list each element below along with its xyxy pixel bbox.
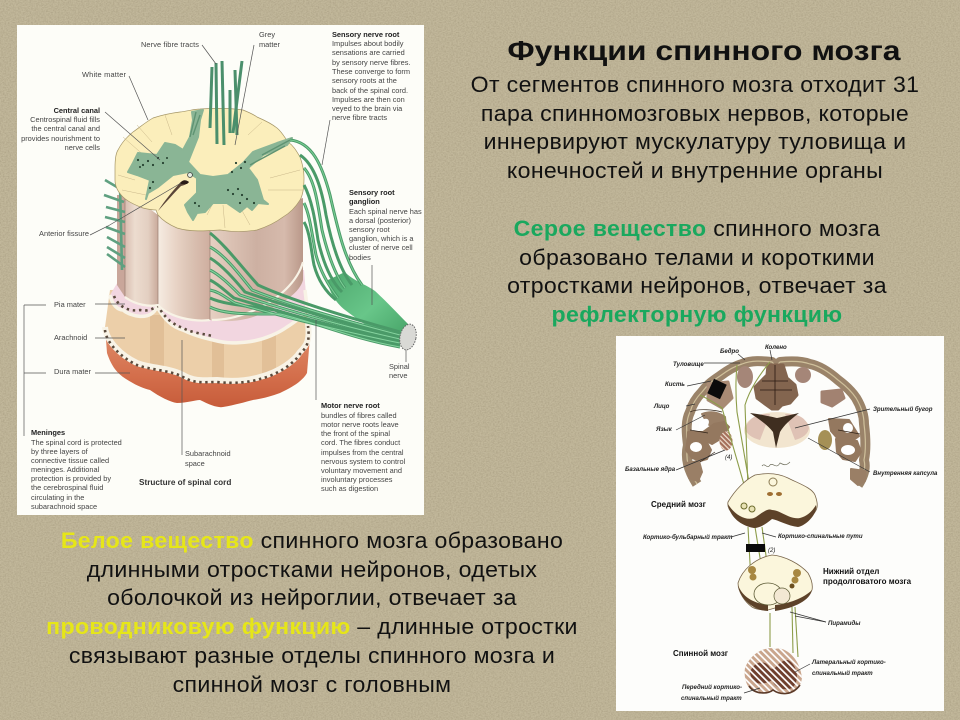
brain and pathway labels: Пирамиды — [828, 620, 861, 627]
meninges: pia mater — [110, 270, 307, 343]
diagram labels: Pia mater — [54, 300, 86, 309]
text block: white matter: связывают разные отделы спинного мозга и — [69, 643, 555, 668]
diagram labels: protection is provided by — [31, 474, 111, 483]
diagram labels: sensations are carried — [332, 48, 405, 57]
text block: spinal nerves: От сегментов спинного мозга отходит 31 — [471, 72, 919, 97]
brain and pathway labels: Туловище — [673, 361, 704, 368]
diagram labels: bodies — [349, 253, 371, 262]
text block: grey matter: образовано телами и короткими — [519, 245, 875, 270]
meninges: arachnoid — [105, 285, 309, 383]
text block: grey matter: отростками нейронов, отвечает за — [507, 273, 887, 298]
diagram labels: Impulses about bodily — [332, 39, 404, 48]
upper gyri — [737, 366, 753, 388]
diagram labels: Arachnoid — [54, 333, 87, 342]
thalamus and ventricle — [744, 412, 810, 448]
text block: grey matter — [507, 216, 887, 327]
brain and pathway labels: (4) — [725, 454, 732, 461]
diagram labels: Grey — [259, 30, 275, 39]
brain and pathway labels: спинальный тракт — [681, 695, 742, 702]
diagram labels: Sensory root — [349, 188, 395, 197]
text block: spinal nerves: конечностей и внутренние органы — [507, 158, 883, 183]
brain and pathway labels: Лицо — [653, 403, 670, 410]
central gyri — [755, 365, 797, 409]
corticospinal tract lines — [700, 362, 798, 657]
brain and pathway labels: Кисть — [665, 381, 685, 388]
text block: white matter: оболочкой из нейроглии, отвечает за — [107, 585, 517, 610]
panel: corticospinal pathways diagram: Нижний отдел — [823, 567, 879, 576]
diagram labels: bundles of fibres called — [321, 411, 397, 420]
diagram labels: sensory root — [349, 225, 390, 234]
panel: corticospinal pathways diagram: Спинной мозг — [673, 649, 729, 658]
brain and pathway labels: спинальный тракт — [812, 670, 873, 677]
diagram labels: veyed to the brain via — [332, 104, 403, 113]
medulla section — [738, 555, 812, 611]
diagram labels: cluster of nerve cell — [349, 243, 413, 252]
diagram labels: Meninges — [31, 428, 65, 437]
text block: white matter: Белое вещество спинного мозга образовано — [61, 528, 563, 553]
diagram labels: Dura mater — [54, 367, 92, 376]
cut surface: grey matter — [128, 110, 292, 220]
diagram labels: cord. The fibres conduct — [321, 438, 400, 447]
diagram labels: Nerve fibre tracts — [141, 40, 199, 49]
text block: white matter: спинной мозг с головным — [173, 672, 451, 697]
diagram labels: These converge to form — [332, 67, 410, 76]
diagram labels: White matter — [82, 70, 127, 79]
diagram labels: a dorsal (posterior) — [349, 216, 411, 225]
text block: spinal nerves — [471, 72, 919, 183]
spinal columns — [117, 190, 303, 321]
spinal cord section — [745, 648, 802, 694]
diagram labels: by three layers of — [31, 447, 89, 456]
diagram labels: nervous system to control — [321, 457, 406, 466]
brain cortex arch — [686, 361, 866, 485]
diagram labels: provides nourishment to — [21, 134, 100, 143]
meninges: dura mater — [105, 327, 310, 407]
diagram labels: Centrospinal fluid fills — [30, 115, 100, 124]
spinal nerve cut end — [397, 323, 419, 351]
panel: corticospinal pathways diagram: Средний мозг — [651, 500, 707, 509]
text block: grey matter: Серое вещество спинного мозга — [514, 216, 880, 241]
brain and pathway labels: Кортико-спинальные пути — [778, 533, 863, 540]
diagram labels: the central canal and — [31, 124, 100, 133]
right gyri — [829, 419, 859, 441]
pathway leader lines — [676, 350, 870, 693]
diagram labels: by sensory nerve fibres. — [332, 58, 410, 67]
left anterior fibres — [104, 180, 125, 270]
text block: spinal nerves: иннервируют мускулатуру туловища и — [484, 129, 906, 154]
diagram labels: nerve fibre tracts — [332, 113, 387, 122]
cortex outer band — [687, 361, 866, 485]
brain and pathway labels: Язык — [655, 426, 673, 433]
diagram labels: back of the spinal cord. — [332, 86, 408, 95]
text block: white matter: длинными отростками нейронов, одетых — [87, 557, 537, 582]
panel: corticospinal pathways diagram: продолговатого мозга — [823, 577, 912, 586]
diagram labels: voluntary movement and — [321, 466, 402, 475]
diagram labels: Impulses are then con — [332, 95, 405, 104]
diagram labels: circulating in the — [31, 493, 84, 502]
brain and pathway labels: (2) — [768, 547, 775, 554]
black lesion marks — [707, 379, 765, 552]
diagram labels: Each spinal nerve has — [349, 207, 422, 216]
diagram labels: the front of the spinal — [321, 429, 390, 438]
diagram labels: impulses from the central — [321, 448, 404, 457]
diagram labels: the cerebrospinal fluid — [31, 483, 103, 492]
brain and pathway labels: Базальные ядра — [625, 466, 676, 473]
brain and pathway labels — [625, 344, 938, 702]
diagram labels: space — [185, 459, 205, 468]
sensory nerve root and ganglion — [290, 140, 410, 348]
text block: grey matter: рефлекторную функцию — [552, 302, 842, 327]
motor nerve root — [210, 233, 400, 347]
basal nuclei hatched — [720, 430, 832, 450]
diagram labels — [21, 30, 422, 511]
diagram labels: matter — [259, 40, 280, 49]
cut surface: white matter — [115, 108, 304, 232]
text block: white matter: проводниковую функцию – длинные отростки — [46, 614, 578, 639]
brain and pathway labels: Латеральный кортико- — [811, 659, 886, 666]
title: Функции спинного мозга — [507, 35, 901, 66]
text block: spinal nerves: пара спинномозговых нервов, которые — [481, 101, 909, 126]
leader lines — [24, 45, 406, 455]
brain and pathway labels: Внутренняя капсула — [873, 470, 938, 477]
diagram labels: involuntary processes — [321, 475, 393, 484]
diagram labels: Subarachnoid — [185, 449, 231, 458]
diagram labels: nerve cells — [65, 143, 100, 152]
brain and pathway labels: Кортико-бульбарный тракт — [643, 534, 733, 541]
diagram labels: motor nerve roots leave — [321, 420, 399, 429]
diagram labels: subarachnoid space — [31, 502, 97, 511]
diagram labels: Motor nerve root — [321, 401, 380, 410]
midbrain section — [728, 462, 817, 528]
diagram labels: Central canal — [54, 106, 100, 115]
anterior fissure and central canal — [158, 173, 192, 211]
diagram labels: Spinal — [389, 362, 410, 371]
diagram labels: Structure of spinal cord — [139, 478, 231, 487]
top nerve fibre tracts — [210, 61, 242, 145]
diagram labels: connective tissue called — [31, 456, 109, 465]
left gyri — [702, 412, 726, 429]
brain and pathway labels: Передний кортико- — [682, 684, 742, 691]
diagram labels: such as digestion — [321, 484, 378, 493]
brain and pathway labels: Колено — [765, 344, 787, 351]
text block: white matter — [46, 528, 578, 697]
brain and pathway labels: Бедро — [720, 348, 739, 355]
diagram labels: ganglion, which is a — [349, 234, 414, 243]
diagram labels: Anterior fissure — [39, 229, 89, 238]
brain and pathway labels: Зрительный бугор — [873, 406, 933, 413]
diagram labels: The spinal cord is protected — [31, 438, 122, 447]
diagram labels: meninges. Additional — [31, 465, 100, 474]
diagram labels: Sensory nerve root — [332, 30, 400, 39]
diagram labels: nerve — [389, 371, 408, 380]
white matter septa — [118, 115, 303, 228]
diagram labels: ganglion — [349, 197, 380, 206]
diagram labels: sensory roots at the — [332, 76, 397, 85]
